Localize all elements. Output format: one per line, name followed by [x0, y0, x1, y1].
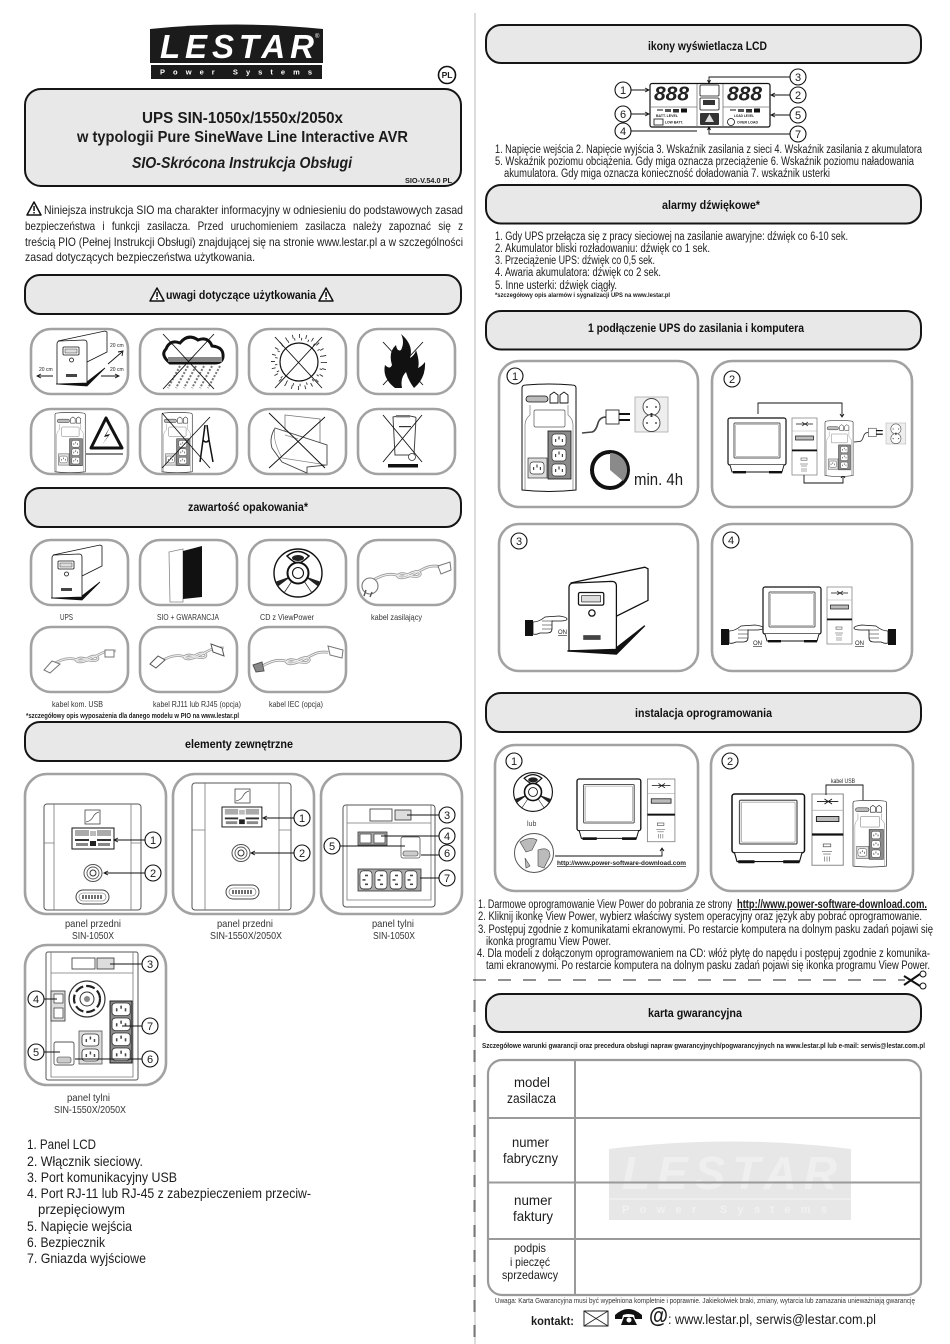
LCD display diagram: OVER LOAD: [737, 120, 758, 124]
icon: do not open with tools: [140, 409, 237, 474]
panel: rear SIN-1550X/2050X: [25, 945, 166, 1116]
title panel: SIO-V.54.0 PL: [405, 178, 453, 185]
install instructions: [477, 899, 933, 972]
alarm list: 3. Przeciążenie UPS: dźwięk co 0,5 sek.: [495, 255, 655, 267]
install instructions: 1. Darmowe oprogramowanie View Power do pobrania ze strony: [478, 899, 732, 911]
panel: rear SIN-1050X: 5: [329, 841, 335, 853]
intro paragraph: Niniejsza instrukcja SIO ma charakter informacyjny w odniesieniu do podstawowych zasad: [44, 203, 463, 217]
install step 1: CD or download: 1: [511, 756, 517, 768]
step 3: switch on UPS: ON: [558, 630, 567, 636]
heading: 1 podłączenie UPS: [486, 311, 921, 350]
icon: 20 cm clearance around UPS: [31, 329, 128, 394]
contact line: @: [649, 1303, 668, 1328]
intro paragraph: [25, 202, 463, 264]
icon: no fire: [358, 329, 455, 394]
warranty table: zasilacza: [507, 1090, 556, 1106]
step 2: connect computer to UPS: [712, 361, 912, 507]
icon: no household waste bin: [358, 409, 455, 474]
watermark logo: Power Systems: [622, 1204, 827, 1216]
warranty table: podpis: [514, 1241, 546, 1255]
parts list: 3. Port komunikacyjny USB: [27, 1169, 177, 1185]
panel: rear SIN-1050X: panel tylni: [372, 918, 414, 930]
install step 2: USB cable: [711, 745, 913, 891]
warranty table: [488, 1060, 921, 1295]
logo: LESTAR Power Systems: ®: [315, 33, 320, 40]
panel: front SIN-1050X: 2: [150, 868, 156, 880]
LCD display diagram: 7: [795, 129, 801, 141]
panel: rear SIN-1050X: SIN-1050X: [373, 930, 415, 942]
LCD display diagram: LOAD LEVEL: [734, 114, 755, 118]
heading: zawartość opakowania: zawartość opakowania*: [188, 500, 308, 514]
panel: rear SIN-1550X/2050X: 3: [147, 959, 153, 971]
heading: alarmy dźwiękowe: [486, 185, 921, 224]
alarm list: 2. Akumulator bliski rozładowaniu: dźwięk co 1 sek.: [495, 243, 710, 255]
parts list: 7. Gniazda wyjściowe: [27, 1250, 146, 1266]
panel: rear SIN-1050X: 4: [444, 831, 450, 843]
alarm list: 5. Inne usterki: dźwięk ciągły.: [495, 280, 617, 292]
heading: elementy zewnętrzne: [25, 722, 461, 761]
contact line: kontakt:: [531, 1316, 574, 1328]
package item: RJ cable: kabel RJ11 lub RJ45 (opcja): [153, 699, 241, 709]
step 3: switch on UPS: [499, 524, 698, 671]
package item: power cable: [358, 540, 455, 622]
watermark logo: [609, 1142, 851, 1220]
panel: rear SIN-1550X/2050X: 6: [147, 1054, 153, 1066]
panel: rear SIN-1050X: 6: [444, 848, 450, 860]
LCD legend text: [495, 144, 922, 180]
panel: front SIN-1550X/2050X: 2: [299, 848, 305, 860]
package item: IEC cable: kabel IEC (opcja): [269, 699, 323, 709]
heading: 1 podłączenie UPS: 1 podłączenie UPS do zasilania i komputera: [588, 321, 804, 335]
install instructions: ikonka programu View Power.: [486, 936, 611, 948]
heading: instalacja oprogramowania: instalacja oprogramowania: [635, 706, 772, 720]
logo: LESTAR Power Systems: LESTAR: [160, 28, 314, 65]
package item: RJ cable: [140, 627, 241, 709]
panel: front SIN-1550X/2050X: [173, 774, 314, 942]
LCD display diagram: 888: [727, 84, 763, 106]
step 2: connect computer to UPS: 2: [729, 374, 735, 386]
title panel: SIO-Skrócona Instrukcja Obsługi: [132, 155, 352, 172]
title panel: w typologii Pure SineWave Line Interactive AVR: [76, 129, 408, 146]
heading: karta gwarancyjna: [486, 994, 921, 1032]
warranty footnote: Uwaga: Karta Gwarancyjna musi być wypełniona kompletnie i poprawnie. Jakiekolwiek braki, zmiany, wytarcia lub zamazania unieważniają gwarancję: [495, 1298, 915, 1305]
LCD display diagram: 888: [654, 84, 690, 106]
panel: rear SIN-1550X/2050X: 7: [147, 1021, 153, 1033]
panel: front SIN-1050X: panel przedni: [65, 918, 121, 930]
heading: ikony wyświetlacza LCD: ikony wyświetlacza LCD: [648, 39, 767, 53]
package item: CD: CD z ViewPower: [260, 612, 314, 622]
intro paragraph: treścią PIO (Pełnej Instrukcji Obsługi) znajdującej się na stronie www.lestar.pl a w szczególności: [25, 235, 463, 249]
warranty table: i pieczęć: [510, 1255, 550, 1269]
LCD display diagram: BATT. LEVEL: [656, 114, 679, 118]
cut line with scissors: [473, 971, 926, 989]
LCD display diagram: 2: [795, 90, 801, 102]
heading: elementy zewnętrzne: elementy zewnętrzne: [185, 737, 293, 751]
heading: karta gwarancyjna: karta gwarancyjna: [648, 1006, 742, 1020]
warranty table: numer: [514, 1192, 552, 1208]
heading: uwagi dotyczące użytkowania: uwagi dotyczące użytkowania: [166, 288, 316, 302]
package item: UPS: UPS: [60, 612, 73, 622]
install step 1: CD or download: [495, 745, 698, 891]
warranty table: faktury: [513, 1208, 553, 1224]
warranty table: sprzedawcy: [502, 1268, 558, 1282]
alarm list: 4. Awaria akumulatora: dźwięk co 2 sek.: [495, 267, 661, 279]
panel: rear SIN-1550X/2050X: SIN-1550X/2050X: [54, 1104, 126, 1116]
panel: front SIN-1050X: SIN-1050X: [72, 930, 114, 942]
watermark logo: LESTAR: [622, 1147, 837, 1199]
parts list: przepięciowym: [38, 1201, 125, 1217]
panel: rear SIN-1050X: 3: [444, 810, 450, 822]
panel: rear SIN-1050X: [321, 774, 462, 942]
package item: USB cable: [31, 627, 128, 709]
heading: zawartość opakowania: [25, 488, 461, 527]
package item: UPS: [31, 540, 128, 622]
alarm list: *szczegółowy opis alarmów i sygnalizacji UPS na www.lestar.pl: [495, 293, 670, 299]
icon: no rain: [140, 329, 237, 394]
page column divider: [474, 13, 476, 1344]
LCD display diagram: 4: [620, 126, 626, 138]
heading: uwagi dotyczące użytkowania: [25, 275, 461, 314]
step 4: switch on computer: ON: [753, 641, 762, 647]
warranty table: model: [514, 1074, 550, 1090]
LCD display diagram: [615, 69, 806, 142]
contact line: [531, 1303, 876, 1328]
parts list: 4. Port RJ-11 lub RJ-45 z zabezpieczeniem przeciw-: [27, 1185, 311, 1201]
icon: no sunlight: [249, 329, 346, 394]
warranty table: numer: [512, 1134, 549, 1150]
step 4: switch on computer: 4: [728, 535, 734, 547]
heading: instalacja oprogramowania: [486, 693, 921, 732]
title panel: UPS SIN-1050x/1550x/2050x: [142, 110, 343, 127]
LCD display diagram: 3: [795, 72, 801, 84]
parts list: 6. Bezpiecznik: [27, 1234, 106, 1250]
install step 2: USB cable: kabel USB: [831, 779, 855, 785]
parts list: 5. Napięcie wejścia: [27, 1218, 132, 1234]
panel: rear SIN-1550X/2050X: 5: [33, 1047, 39, 1059]
language badge PL: [438, 66, 456, 84]
LCD display diagram: 5: [795, 110, 801, 122]
step 1: connect UPS to mains, charge 4h: [499, 361, 698, 507]
parts list: 2. Włącznik sieciowy.: [27, 1153, 143, 1169]
warranty table: fabryczny: [503, 1150, 558, 1166]
icon: 20 cm clearance around UPS: 20 cm: [110, 367, 124, 373]
heading: ikony wyświetlacza LCD: [486, 25, 921, 63]
parts list: 1. Panel LCD: [27, 1136, 96, 1152]
install step 1: CD or download: lub: [527, 821, 536, 828]
package item: IEC cable: [249, 627, 346, 709]
panel: rear SIN-1550X/2050X: 4: [33, 994, 39, 1006]
panel: front SIN-1550X/2050X: 1: [299, 813, 305, 825]
intro paragraph: bezpieczeństwa i funkcji zasilacza. Przed uruchomieniem zasilacza należy zapoznać się z: [25, 219, 463, 233]
icon: electric shock warning: [31, 409, 128, 474]
LCD display diagram: 1: [620, 85, 626, 97]
icon: 20 cm clearance around UPS: 20 cm: [110, 343, 124, 349]
contact line: : www.lestar.pl, serwis@lestar.com.pl: [668, 1311, 876, 1327]
install step 1: CD or download: http://www.power-software-download.com: [557, 860, 686, 867]
panel: front SIN-1050X: 1: [150, 835, 156, 847]
step 4: switch on computer: ON: [855, 641, 864, 647]
parts list: [27, 1136, 311, 1266]
LCD display diagram: LOW BATT.: [665, 120, 683, 124]
package item: USB cable: kabel kom. USB: [52, 699, 103, 709]
language badge PL: PL: [442, 70, 452, 80]
icon: not for printers: [249, 409, 346, 474]
intro paragraph: zasad dotyczących bezpieczeństwa użytkowania.: [25, 250, 255, 264]
panel: front SIN-1050X: [25, 774, 166, 942]
package item: power cable: kabel zasilający: [371, 612, 423, 622]
step 1: connect UPS to mains, charge 4h: 1: [512, 371, 518, 383]
icon: 20 cm clearance around UPS: 20 cm: [39, 367, 53, 373]
step 4: switch on computer: [712, 524, 912, 671]
panel: rear SIN-1550X/2050X: panel tylni: [67, 1092, 110, 1104]
step 1: connect UPS to mains, charge 4h: min. 4h: [634, 470, 683, 489]
LCD display diagram: 6: [620, 109, 626, 121]
alarm list: 1. Gdy UPS przełącza się z pracy sieciowej na zasilanie awaryjne: dźwięk co 6-10 sek.: [495, 231, 848, 243]
panel: front SIN-1550X/2050X: SIN-1550X/2050X: [210, 930, 282, 942]
logo: LESTAR Power Systems: [150, 24, 323, 79]
package footnote: *szczegółowy opis wyposażenia dla danego modelu w PIO na www.lestar.pl: [26, 713, 239, 720]
panel: rear SIN-1050X: 7: [444, 873, 450, 885]
install step 2: USB cable: 2: [727, 756, 733, 768]
package item: CD: [249, 540, 346, 622]
package item: manual and warranty: [140, 540, 237, 622]
LCD legend text: akumulatora. Gdy miga oznacza konieczność doładowania 7. wskaźnik usterki: [504, 168, 830, 180]
package item: manual and warranty: SIO + GWARANCJA: [157, 612, 219, 622]
panel: front SIN-1550X/2050X: panel przedni: [217, 918, 273, 930]
heading: alarmy dźwiękowe: alarmy dźwiękowe*: [662, 198, 760, 212]
step 3: switch on UPS: 3: [516, 536, 522, 548]
alarm list: [495, 231, 848, 299]
title panel: [25, 89, 461, 186]
logo: LESTAR Power Systems: Power Systems: [160, 68, 312, 76]
